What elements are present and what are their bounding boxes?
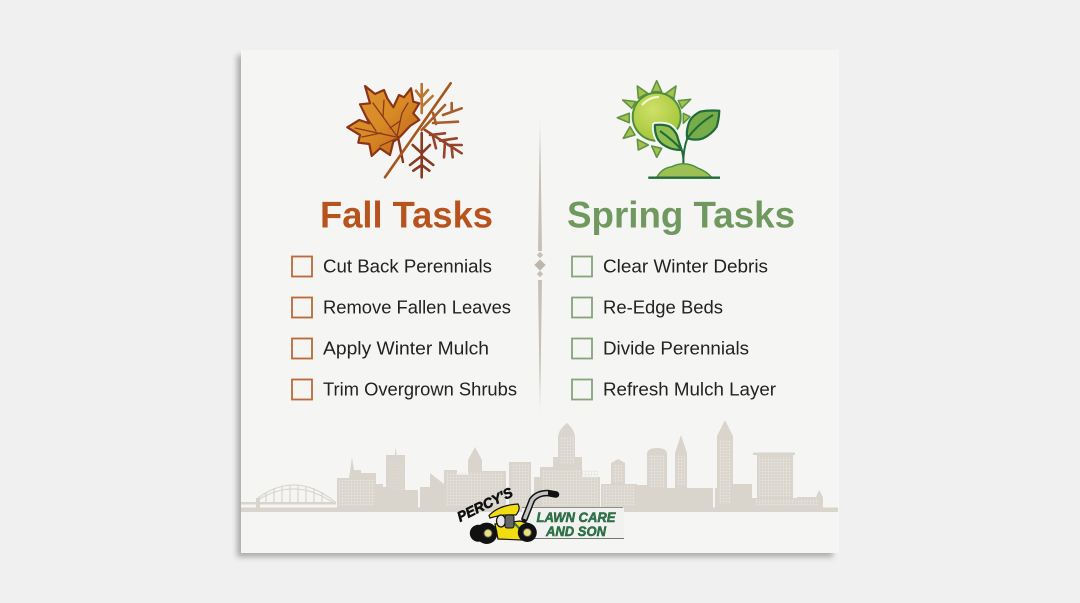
icon: autumn leaf and frost branch	[347, 83, 462, 177]
item: Re-Edge Beds: Re-Edge Beds	[603, 296, 723, 318]
logo name panel	[522, 508, 624, 538]
logo: Percy's Lawn Care and Son	[454, 484, 624, 544]
logo text: percy's: PERCY'S	[454, 484, 516, 525]
skyline	[241, 420, 838, 512]
item: Refresh Mulch Layer: Refresh Mulch Layer	[603, 378, 776, 400]
list: fall tasks	[292, 256, 517, 400]
building window texture	[339, 436, 819, 506]
item: Divide Perennials: Divide Perennials	[603, 338, 749, 358]
heading: Fall Tasks: Fall Tasks	[320, 194, 493, 236]
item: Clear Winter Debris: Clear Winter Debris	[603, 256, 768, 276]
item: Apply Winter Mulch: Apply Winter Mulch	[323, 338, 489, 358]
logo text: and son: AND SON	[545, 524, 606, 539]
item: Trim Overgrown Shrubs: Trim Overgrown Shrubs	[323, 378, 517, 400]
logo text: lawn care: LAWN CARE	[536, 510, 616, 525]
card shadow	[237, 55, 833, 557]
item: Cut Back Perennials: Cut Back Perennials	[323, 256, 492, 276]
item: Remove Fallen Leaves: Remove Fallen Leaves	[323, 296, 511, 318]
mower illustration	[470, 493, 556, 544]
icon: sun and seedling	[617, 81, 720, 178]
list: spring tasks	[572, 256, 776, 400]
panel: card	[241, 50, 839, 553]
heading: Spring Tasks: Spring Tasks	[567, 194, 795, 236]
divider	[534, 115, 546, 416]
